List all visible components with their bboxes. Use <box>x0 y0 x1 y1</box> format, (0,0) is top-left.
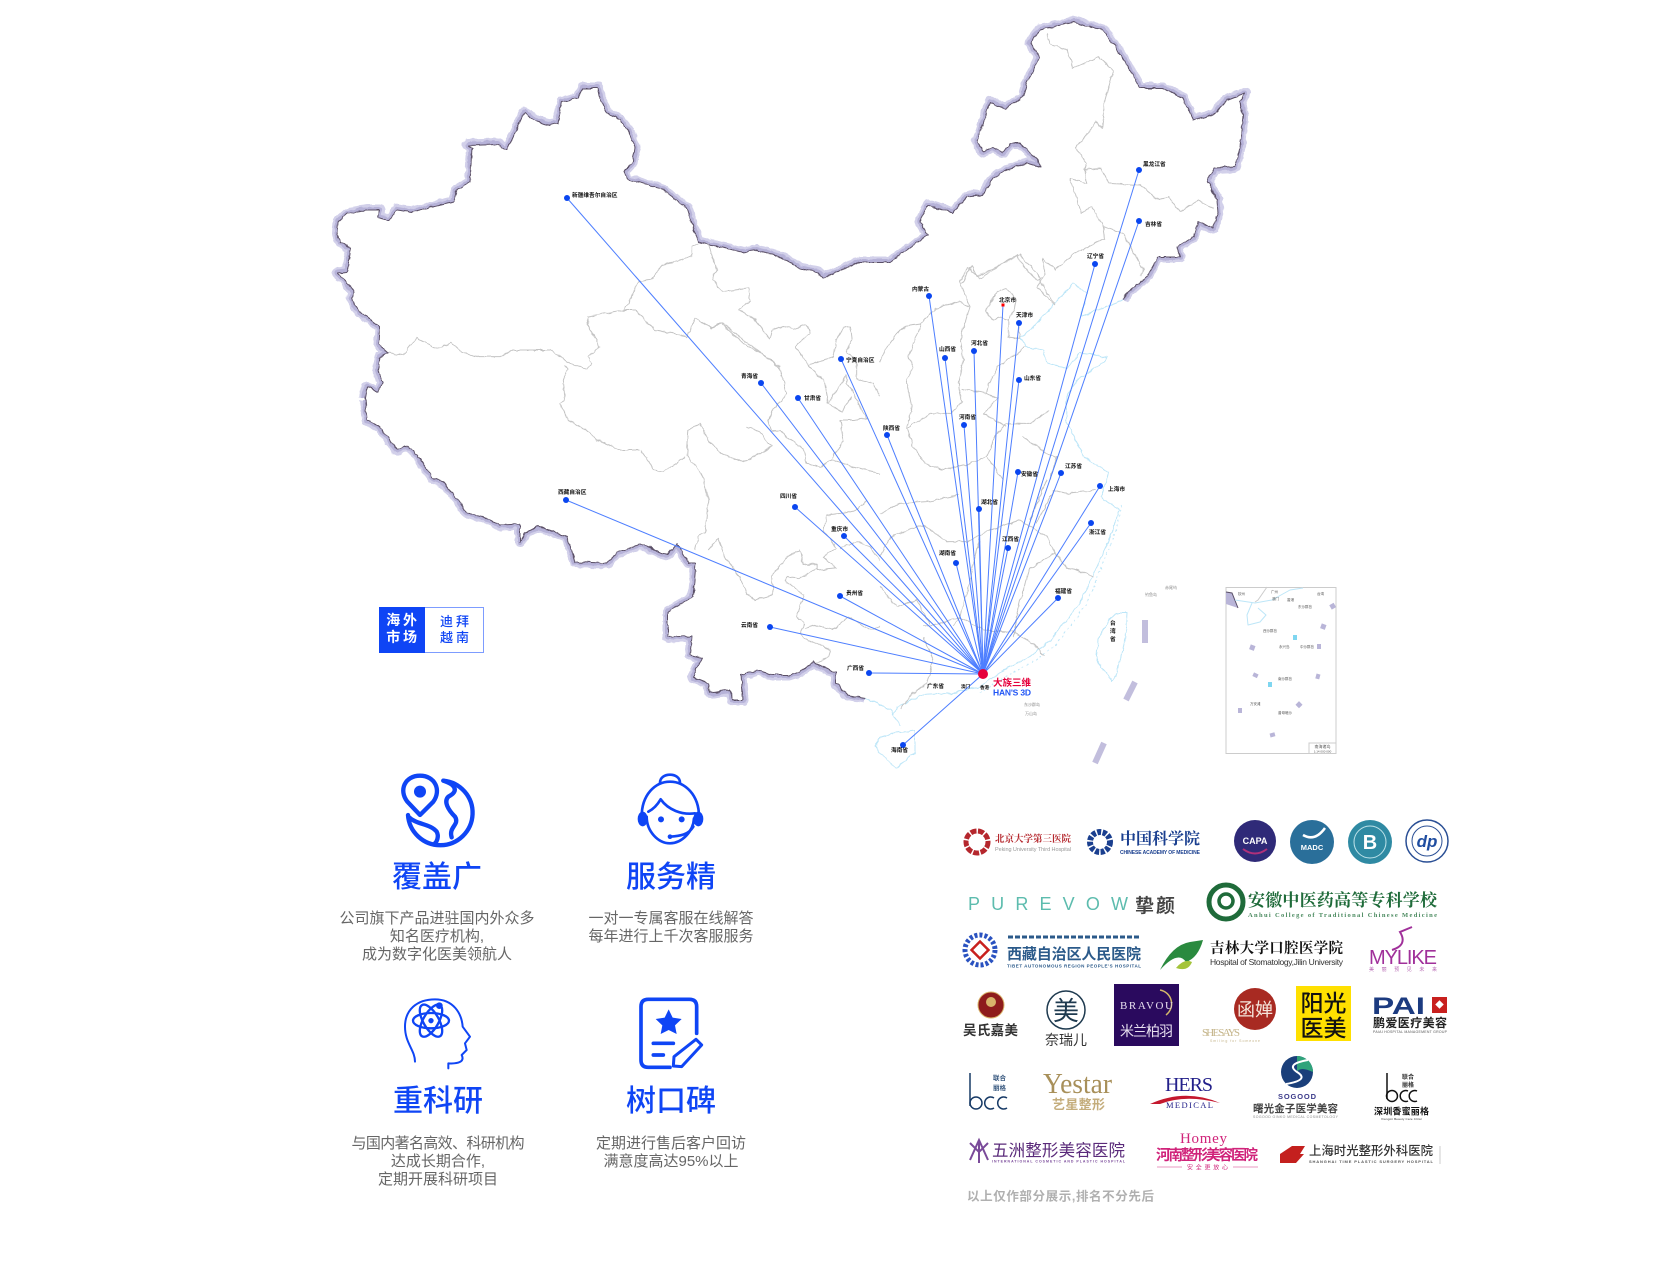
logo: PAI <box>1372 993 1448 1034</box>
logo: MYLIKE <box>1369 927 1437 973</box>
logo: BRAVOU: BRAVOU <box>1120 1000 1173 1012</box>
overseas market badge: 市场 <box>386 629 420 645</box>
map of China <box>337 22 1245 768</box>
province labels: 吉林省 <box>1145 220 1162 228</box>
description: 成为数字化医美领航人 <box>362 946 512 963</box>
logo: CAPA badge <box>1234 820 1276 862</box>
province labels: 北京市 <box>999 296 1016 304</box>
province labels: 上海市 <box>1108 485 1125 493</box>
province labels: 重庆市 <box>831 525 848 533</box>
description <box>352 1135 524 1188</box>
logo: Homey Henan plastic surgery: 安全更放心 <box>1187 1164 1228 1172</box>
province labels: 四川省 <box>780 492 797 500</box>
logo: PAI: PAI <box>1372 993 1425 1020</box>
logo: Tibet Autonomous Region People's Hospital: TIBET AUTONOMOUS REGION PEOPLE'S HOSPITAL <box>1007 964 1141 968</box>
province labels: 陕西省 <box>883 424 900 432</box>
logo: Nairui'er: 奈瑞儿 <box>1045 1032 1087 1048</box>
logo: B badge: B <box>1363 832 1377 854</box>
logo: SHE SAYS: 函婵 <box>1237 1000 1273 1020</box>
province labels: 河南省 <box>959 413 976 421</box>
inset: South China Sea islands: 东沙群岛 <box>1298 604 1312 609</box>
logo: HERS Medical: MEDICAL <box>1166 1100 1213 1110</box>
province labels: 西藏自治区 <box>558 488 587 496</box>
logo: Peking University Third Hospital: Peking University Third Hospital <box>995 847 1071 853</box>
logo: MYLIKE: 美丽预见未来 <box>1369 966 1437 973</box>
logo: Chinese Academy of Medical Sciences: CHINESE ACADEMY OF MEDICINE <box>1120 850 1201 856</box>
province dots <box>563 167 1142 748</box>
province labels: 台 <box>1110 619 1116 627</box>
land fill <box>337 22 1245 726</box>
footnote: 以上仅作部分展示,排名不分先后 <box>967 1188 1154 1204</box>
overseas market badge <box>379 607 484 653</box>
logo: Homey Henan plastic surgery: Homey <box>1180 1131 1228 1147</box>
province labels: 辽宁省 <box>1087 252 1104 260</box>
province labels: 云南省 <box>741 621 758 629</box>
heading: 服务精 <box>626 861 716 894</box>
province labels: 河北省 <box>971 339 988 347</box>
logo: bcc black: 联合 <box>1402 1073 1414 1081</box>
inset: South China Sea islands <box>1226 587 1336 754</box>
province labels: 山东省 <box>1024 374 1041 382</box>
description <box>588 910 754 945</box>
logo: Sogood: SOGOOD <box>1278 1092 1317 1101</box>
logo: bcc black: 丽格 <box>1402 1081 1414 1089</box>
province labels: 天津市 <box>1016 311 1033 319</box>
logo: Homey Henan plastic surgery: 河南整形美容医院 <box>1156 1146 1258 1164</box>
description <box>596 1135 746 1170</box>
logo: Nairui'er: 美 <box>1053 996 1079 1026</box>
logo: PUREVOW: 挚颜 <box>1135 895 1175 917</box>
logo: HERS Medical: HERS <box>1165 1074 1213 1096</box>
logo: SHE SAYS: SHE SAYS <box>1202 1027 1240 1039</box>
province labels: 澳门 <box>961 683 970 690</box>
logo: bcc navy: 联合 <box>993 1073 1006 1082</box>
overseas market badge: 迪拜 <box>440 614 472 629</box>
logo: Wu's Jiamei: 吴氏嘉美 <box>963 1022 1018 1038</box>
overseas market badge: 越南 <box>440 630 472 645</box>
logo: bcc navy <box>970 1073 1007 1109</box>
logo: Sogood: 曙光金子医学美容 <box>1253 1102 1338 1115</box>
icon: globe with pin <box>403 776 473 845</box>
national border line <box>337 22 1245 700</box>
icon: document with star and pen <box>641 999 702 1067</box>
small sea labels: 东沙群岛 <box>1024 701 1040 707</box>
small sea labels: 赤尾屿 <box>1165 584 1177 590</box>
hub marker <box>978 669 988 679</box>
province labels: 贵州省 <box>846 589 863 597</box>
province labels: 浙江省 <box>1089 528 1106 536</box>
province labels: 福建省 <box>1055 587 1072 595</box>
logo: Anhui College of Traditional Chinese Medicine <box>1209 885 1439 919</box>
description: 达成长期合作, <box>391 1153 485 1170</box>
logo: Shanghai Time plastic surgery <box>1280 1143 1440 1164</box>
heading: 树口碑 <box>626 1085 716 1118</box>
inset: South China Sea islands: 永兴岛 <box>1279 644 1290 649</box>
logo: Tibet Autonomous Region People's Hospital: 西藏自治区人民医院 <box>1007 945 1141 963</box>
province labels: 安徽省 <box>1021 470 1038 478</box>
logo: Shanghai Time plastic surgery: SHANGHAI TIME PLASTIC SURGERY HOSPITAL <box>1309 1159 1434 1164</box>
description: 公司旗下产品进驻国内外众多 <box>339 910 535 927</box>
logo: Sogood: SOGOOD GINKO MEDICAL COSMETOLOGY <box>1253 1115 1339 1119</box>
logo: Wu's Jiamei <box>963 992 1018 1038</box>
inset: South China Sea islands: 澳门 <box>1272 596 1280 601</box>
inset: South China Sea islands: 中沙群岛 <box>1300 644 1314 649</box>
logo: MADC badge: MADC <box>1301 843 1324 852</box>
logo: Chinese Academy of Medical Sciences <box>1090 829 1201 856</box>
logo: SHE SAYS: Smiling for Someone <box>1210 1039 1260 1043</box>
description: 知名医疗机构, <box>390 928 484 945</box>
panel: refined service <box>588 775 754 945</box>
icon: customer service agent <box>639 775 702 843</box>
inset: South China Sea islands: 南沙群岛 <box>1278 676 1292 681</box>
small sea labels: 万山岛 <box>1025 710 1037 716</box>
logo: Wuzhou plastic surgery <box>970 1140 1126 1164</box>
logo: Sogood <box>1253 1056 1339 1119</box>
province labels: 湖北省 <box>981 498 998 506</box>
province labels: 省 <box>1110 635 1116 643</box>
description: 每年进行上千次客服服务 <box>588 928 754 945</box>
logo: PAI: PAIAI HOSPITAL MANAGEMENT GROUP <box>1373 1030 1448 1034</box>
logo: BRAVOU: 米兰柏羽 <box>1120 1023 1173 1039</box>
panel: research focus <box>352 999 524 1188</box>
inset scale box <box>1309 743 1336 754</box>
inset: South China Sea islands: 万安滩 <box>1250 701 1261 706</box>
logo: HERS Medical <box>1150 1074 1220 1110</box>
small sea labels <box>1024 584 1177 716</box>
province boundaries <box>388 33 1213 710</box>
panel: wide coverage <box>339 776 535 963</box>
inset: South China Sea islands: 台湾 <box>1317 591 1324 596</box>
logo: Sunshine Medical Beauty: 医美 <box>1300 1015 1346 1041</box>
province labels: 湖南省 <box>939 549 956 557</box>
province labels: 广西省 <box>847 664 864 672</box>
logo: Jilin University Hospital of Stomatology: 吉林大学口腔医学院 <box>1210 939 1344 957</box>
panel: reputation <box>596 999 746 1170</box>
province labels: 青海省 <box>741 372 758 380</box>
logo: Yestar: 艺星整形 <box>1052 1097 1105 1112</box>
logo: Peking University Third Hospital: 北京大学第三医院 <box>995 833 1071 845</box>
base map outlines <box>337 22 1245 768</box>
logo: PUREVOW: PUREVOW <box>968 894 1128 914</box>
logo: Wuzhou plastic surgery: 五洲整形美容医院 <box>992 1141 1125 1160</box>
national border inner halo <box>337 22 1245 700</box>
heading: 重科研 <box>393 1085 483 1118</box>
logo: Nairui'er <box>1045 991 1087 1048</box>
logo: Shanghai Time plastic surgery: 上海时光整形外科医院 <box>1309 1143 1434 1158</box>
inset: South China Sea islands: 广州 <box>1271 589 1278 594</box>
logo: MADC badge <box>1290 820 1334 864</box>
Han's 3D logo <box>993 677 1031 698</box>
province labels <box>558 160 1166 754</box>
overseas market badge: 海外 <box>386 612 420 628</box>
logo: bcc black: Xiangmi Beauty Care Clinic <box>1381 1117 1422 1121</box>
inset: South China Sea islands: 曾母暗沙 <box>1278 710 1292 715</box>
logo: bcc black <box>1374 1073 1429 1121</box>
province labels: 湾 <box>1110 627 1116 635</box>
logo: BRAVOU <box>1114 984 1179 1046</box>
province labels: 山西省 <box>939 345 956 353</box>
description <box>339 910 535 963</box>
description: 满意度高达95%以上 <box>603 1152 739 1170</box>
description: 定期开展科研项目 <box>378 1171 498 1188</box>
province labels: 广东省 <box>927 682 944 690</box>
province labels: 黑龙江省 <box>1143 160 1166 168</box>
logo: dp badge <box>1406 820 1448 862</box>
inset: South China Sea islands: 西沙群岛 <box>1263 628 1278 633</box>
logo: Sunshine Medical Beauty <box>1296 986 1351 1041</box>
logo: Anhui College of Traditional Chinese Medicine: Anhui College of Traditional Chinese Medicine <box>1248 912 1437 919</box>
description: 一对一专属客服在线解答 <box>588 910 754 927</box>
logo: Peking University Third Hospital <box>966 831 1071 853</box>
province labels: 新疆维吾尔自治区 <box>572 191 618 199</box>
icon: head with atom <box>405 999 470 1068</box>
province labels: 内蒙古 <box>912 285 929 293</box>
logo: bcc navy: 丽格 <box>993 1083 1006 1092</box>
logo: Jilin University Hospital of Stomatology: Hospital of Stomatology,Jilin University <box>1210 957 1344 967</box>
small sea labels: 钓鱼岛 <box>1145 591 1157 597</box>
logo: Homey Henan plastic surgery <box>1156 1131 1258 1172</box>
logo: Wuzhou plastic surgery: INTERNATIONAL COSMETIC AND PLASTIC HOSPITAL <box>992 1160 1126 1164</box>
description: 定期进行售后客户回访 <box>596 1135 746 1152</box>
province labels: 海南省 <box>891 746 908 754</box>
inset scale box: 1:14 000 000 <box>1314 750 1332 754</box>
logo: Chinese Academy of Medical Sciences: 中国科学院 <box>1120 829 1200 848</box>
logo: B badge <box>1348 820 1392 864</box>
panel: partner logos <box>963 820 1448 1204</box>
logo: Yestar: Yestar <box>1043 1068 1112 1100</box>
province labels: 宁夏自治区 <box>846 356 875 364</box>
national border halo <box>337 22 1245 700</box>
logo: MYLIKE: MYLIKE <box>1369 947 1437 969</box>
province labels: 江西省 <box>1002 535 1019 543</box>
logo: Sunshine Medical Beauty: 阳光 <box>1300 990 1346 1016</box>
description: 与国内著名高效、科研机构 <box>352 1135 524 1152</box>
connection lines from hub <box>566 170 1139 745</box>
coastline and islands <box>865 283 1127 768</box>
inset scale box: 南海诸岛 <box>1314 743 1330 749</box>
province labels: 甘肃省 <box>804 394 821 402</box>
Han's 3D logo: 大族三维 <box>993 677 1031 689</box>
logo: Tibet Autonomous Region People's Hospital <box>965 935 1141 968</box>
logo: Jilin University Hospital of Stomatology <box>1160 939 1344 970</box>
province labels: 香港 <box>980 684 989 691</box>
province labels: 江苏省 <box>1065 462 1082 470</box>
inset: South China Sea islands: 钦州 <box>1238 591 1246 596</box>
logo: CAPA badge: CAPA <box>1243 836 1268 846</box>
logo: Anhui College of Traditional Chinese Medicine: 安徽中医药高等专科学校 <box>1248 890 1439 910</box>
logo: PAI: 鹏爱医疗美容 <box>1373 1015 1447 1030</box>
Han's 3D logo: HAN'S 3D <box>993 688 1031 698</box>
logo: SHE SAYS <box>1202 988 1276 1043</box>
inset: South China Sea islands: 香港 <box>1287 597 1294 602</box>
nine-dash line segments <box>1095 620 1148 763</box>
logo: bcc black: 深圳香蜜丽格 <box>1374 1106 1429 1116</box>
logo: PUREVOW <box>968 894 1175 917</box>
logo: dp badge: dp <box>1417 832 1437 851</box>
heading: 覆盖广 <box>392 861 482 894</box>
